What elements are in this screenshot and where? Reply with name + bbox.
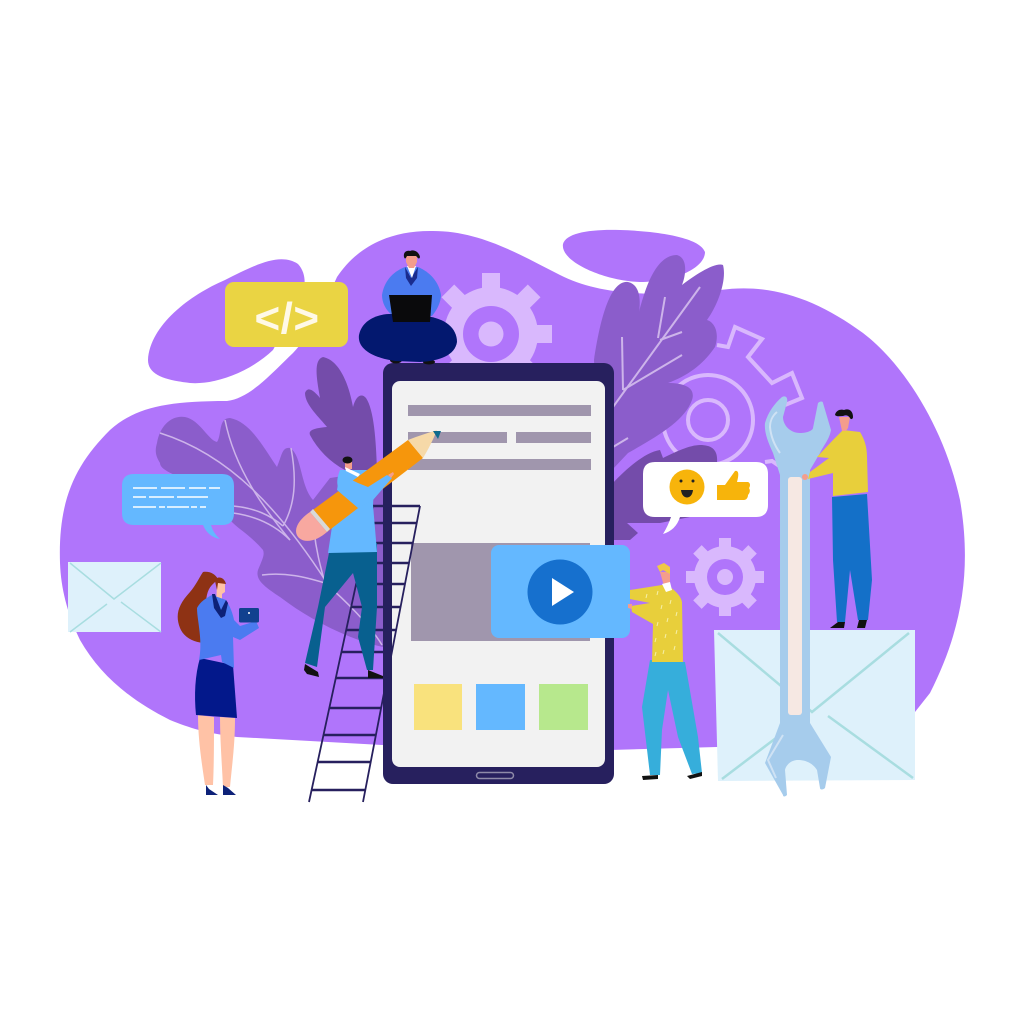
code tag card: </> — [254, 294, 320, 343]
leaf: dark behind phone — [305, 357, 377, 490]
code tag card — [225, 282, 348, 347]
gear: outline — [663, 327, 802, 470]
leaf: left large — [156, 417, 383, 647]
woman with tablet — [178, 572, 259, 795]
smiley — [670, 470, 704, 504]
envelope right — [714, 630, 915, 781]
video card — [491, 545, 630, 638]
home button — [476, 772, 514, 778]
tile blue — [476, 684, 525, 730]
person on top with laptop — [359, 250, 457, 364]
phone text bars — [408, 405, 591, 470]
phone — [383, 363, 614, 784]
man with pencil — [296, 430, 441, 678]
pencil — [296, 430, 441, 541]
man in yellow holding wrench — [802, 409, 872, 628]
gear: top center — [430, 273, 552, 395]
wrench — [765, 396, 831, 796]
speech bubble blue — [122, 474, 234, 539]
background blobs — [60, 230, 965, 750]
envelope left — [68, 562, 161, 632]
tile green — [539, 684, 588, 730]
gear: small right — [686, 538, 764, 616]
man in yellow sweater — [628, 563, 702, 780]
leaf: right large — [594, 255, 724, 500]
smile and thumbs bubble — [643, 462, 768, 534]
tile yellow — [414, 684, 462, 730]
phone image block — [411, 543, 590, 641]
ladder — [309, 506, 420, 802]
thumbs up — [717, 471, 750, 500]
leaf: dark right lower — [613, 445, 717, 540]
